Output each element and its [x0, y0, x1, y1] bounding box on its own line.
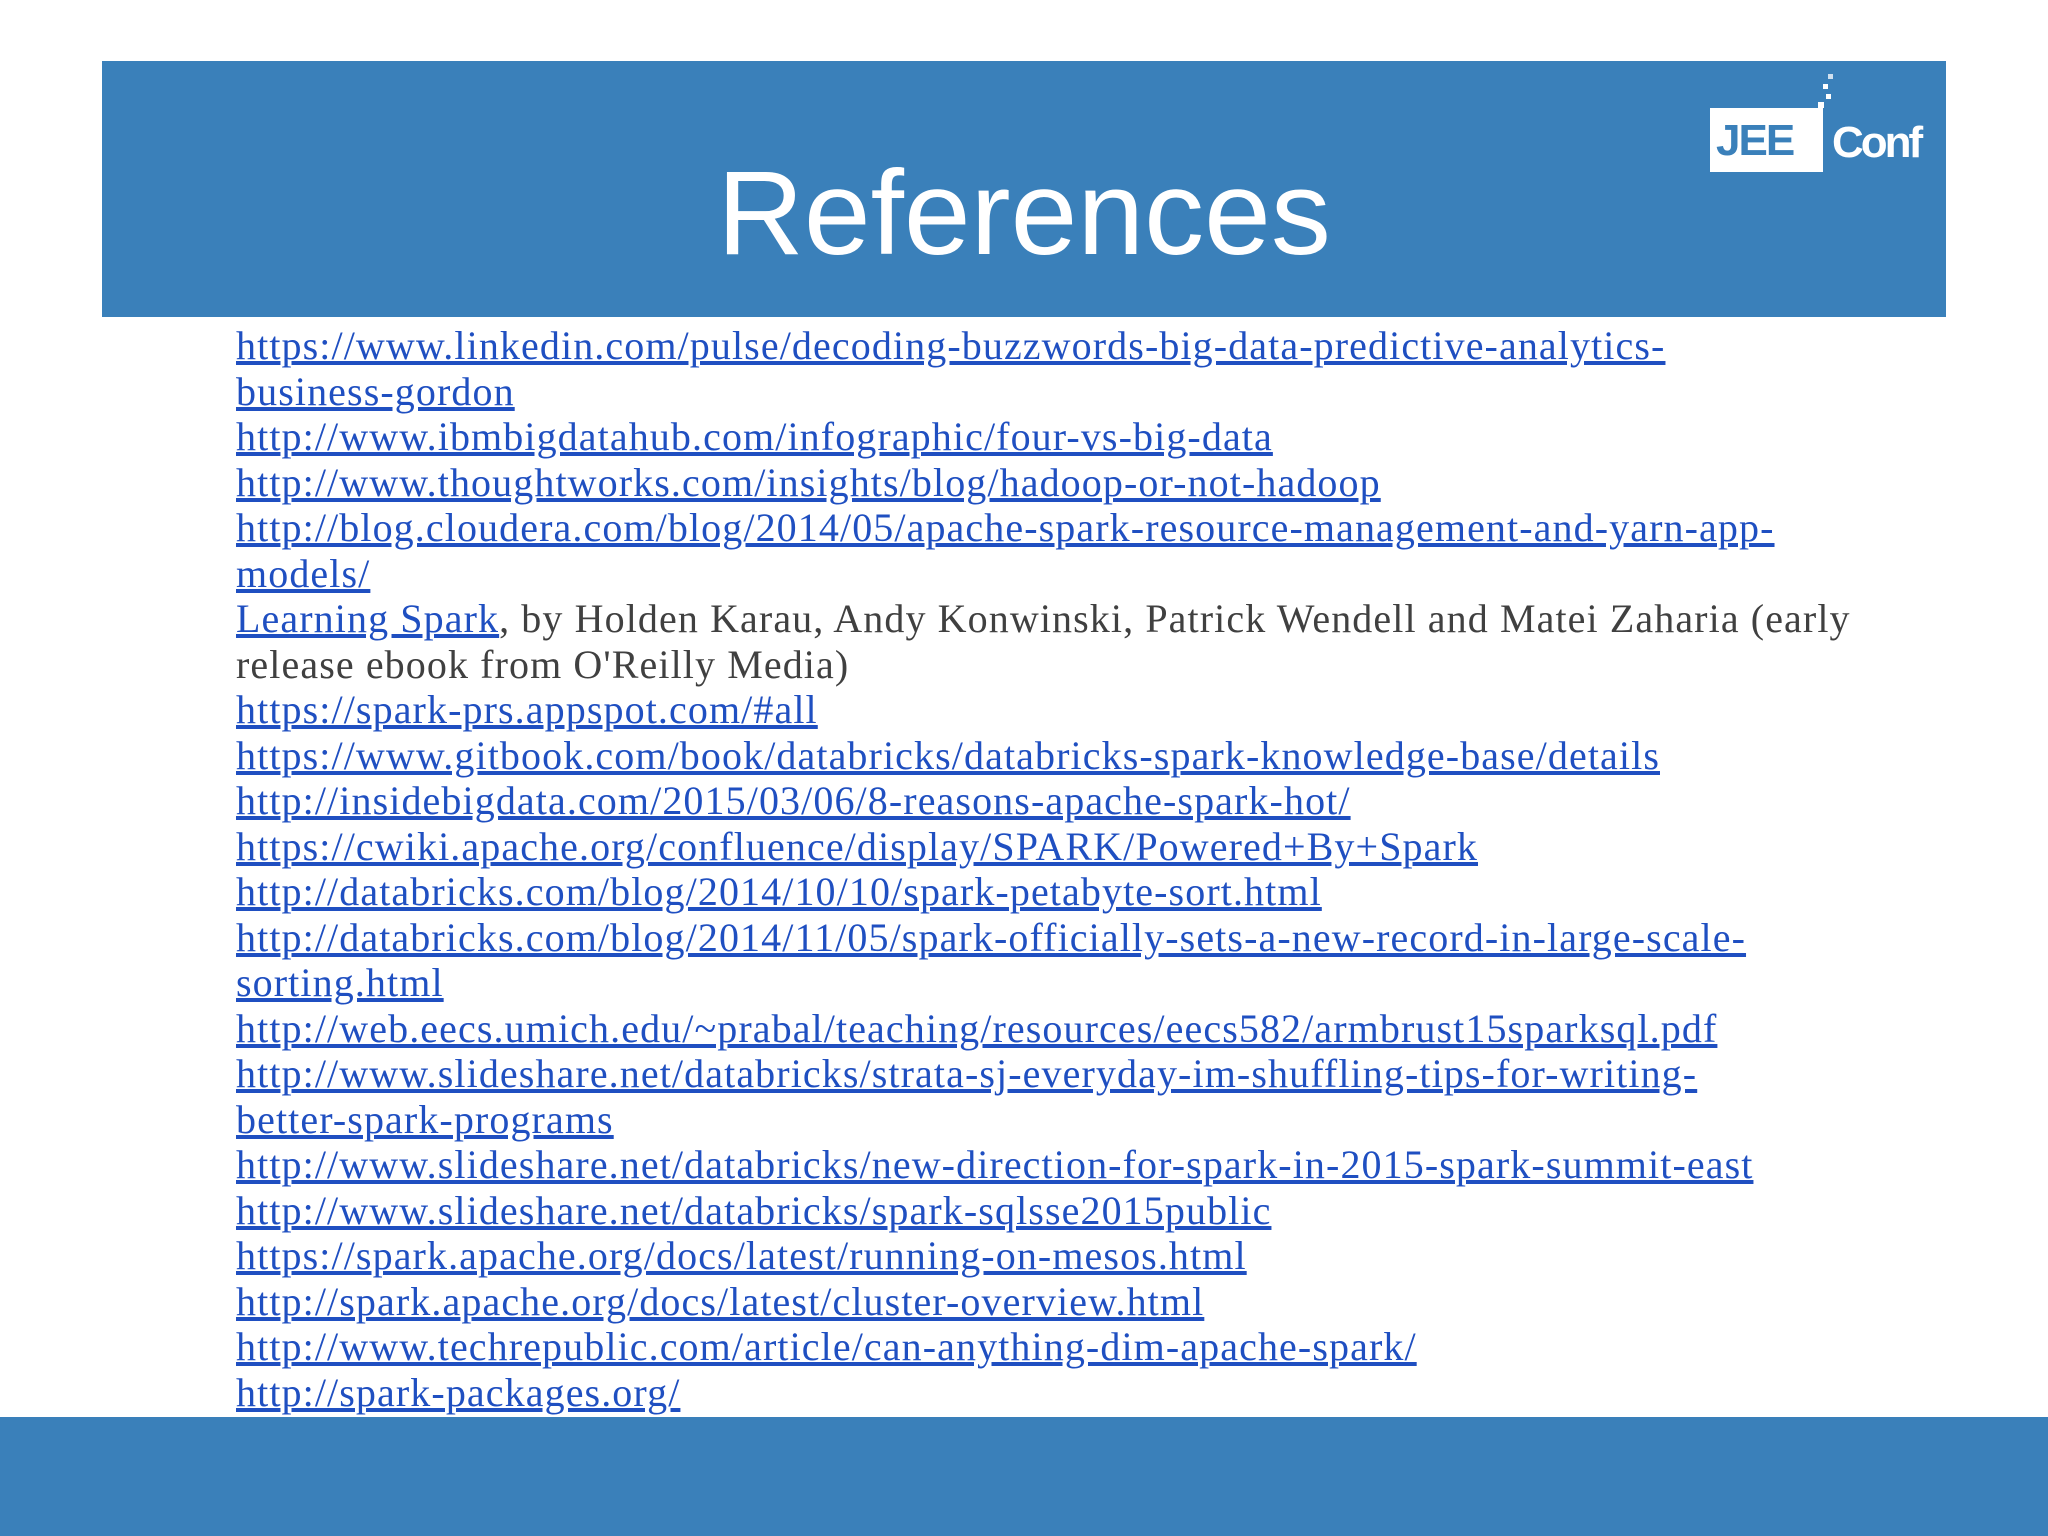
- references list: http://www.techrepublic.com/article/can-anything-dim-apache-spark/: [236, 1324, 1417, 1369]
- references list: http://web.eecs.umich.edu/~prabal/teaching/resources/eecs582/armbrust15sparksql.pdf: [236, 1006, 1717, 1050]
- references list: http://www.ibmbigdatahub.com/infographic/four-vs-big-data: [236, 414, 1273, 459]
- references list: http://databricks.com/blog/2014/11/05/spark-officially-sets-a-new-record-in-large-scale-: [236, 914, 1746, 960]
- references list: https://www.linkedin.com/pulse/decoding-buzzwords-big-data-predictive-analytics-: [236, 323, 1665, 368]
- references list: https://www.gitbook.com/book/databricks/databricks-spark-knowledge-base/details: [236, 732, 1660, 778]
- references list: https://spark-prs.appspot.com/#all: [236, 687, 818, 732]
- references list: sorting.html: [236, 960, 444, 1005]
- references list: http://spark.apache.org/docs/latest/cluster-overview.html: [236, 1278, 1204, 1324]
- title: References: [717, 146, 1331, 280]
- header band: [102, 61, 1946, 317]
- footer band: [0, 1417, 2048, 1536]
- logo: JEE Conf: [1710, 74, 1924, 172]
- references list: http://www.slideshare.net/databricks/new-direction-for-spark-in-2015-spark-summit-east: [236, 1142, 1753, 1187]
- references list: http://insidebigdata.com/2015/03/06/8-reasons-apache-spark-hot/: [236, 778, 1351, 823]
- logo: JEE Conf: JEE: [1716, 116, 1793, 165]
- references list: http://blog.cloudera.com/blog/2014/05/apache-spark-resource-management-and-yarn-app-: [236, 505, 1775, 550]
- references list: release ebook from O'Reilly Media): [236, 642, 849, 686]
- references list: business-gordon: [236, 368, 515, 414]
- references list: [236, 323, 1851, 1414]
- references list: models/: [236, 550, 370, 596]
- references list: https://spark.apache.org/docs/latest/running-on-mesos.html: [236, 1233, 1247, 1278]
- references list: https://cwiki.apache.org/confluence/display/SPARK/Powered+By+Spark: [236, 824, 1478, 868]
- references list: Learning Spark, by Holden Karau, Andy Konwinski, Patrick Wendell and Matei Zaharia (early: [236, 596, 1851, 641]
- references list: http://databricks.com/blog/2014/10/10/spark-petabyte-sort.html: [236, 869, 1322, 914]
- logo: JEE Conf: Conf: [1832, 118, 1920, 167]
- references list: http://www.slideshare.net/databricks/strata-sj-everyday-im-shuffling-tips-for-writing-: [236, 1051, 1697, 1096]
- references list: http://www.slideshare.net/databricks/spark-sqlsse2015public: [236, 1188, 1271, 1232]
- references list: better-spark-programs: [236, 1096, 614, 1142]
- references list: http://spark-packages.org/: [236, 1370, 680, 1414]
- references list: http://www.thoughtworks.com/insights/blog/hadoop-or-not-hadoop: [236, 460, 1381, 504]
